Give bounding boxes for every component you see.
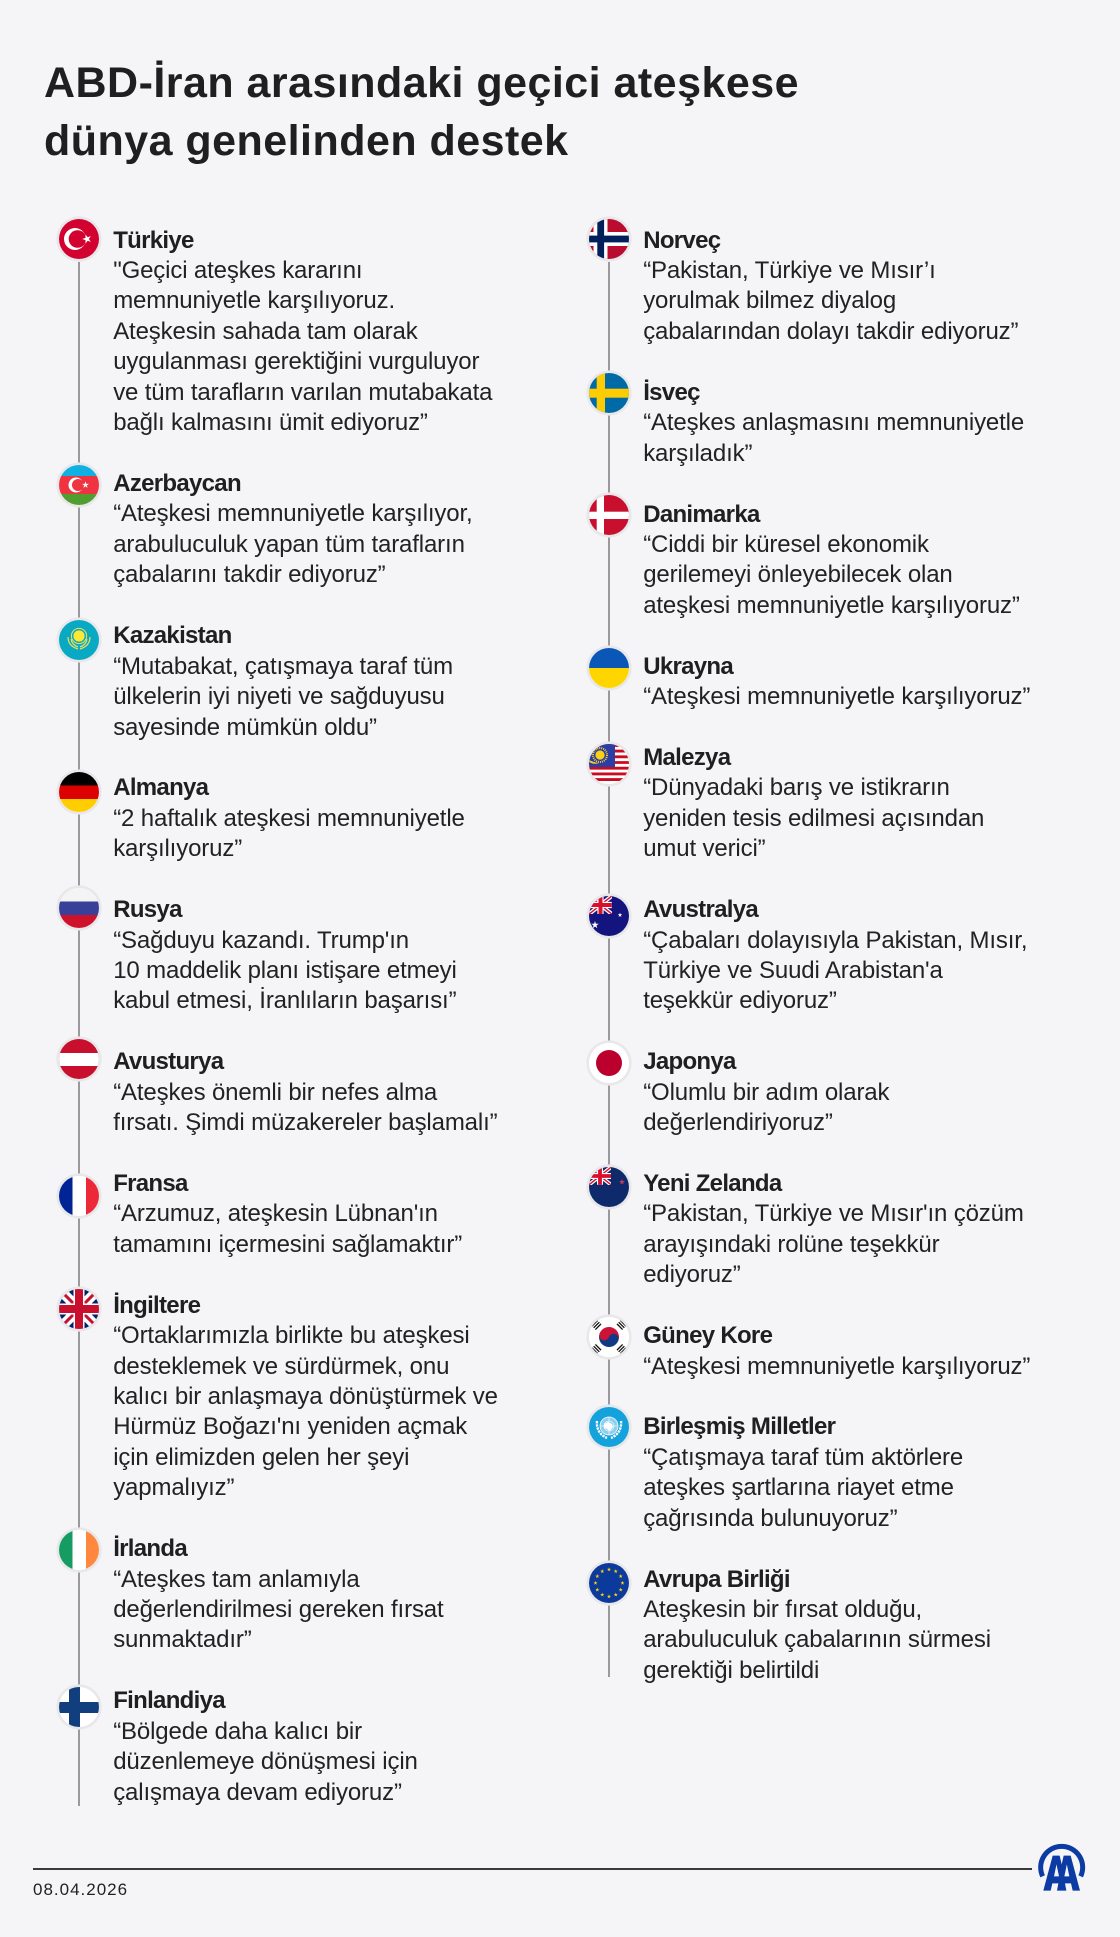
quote: “2 haftalık ateşkesi memnuniyetle bbox=[113, 805, 465, 832]
quote: Hürmüz Boğazı'nı yeniden açmak bbox=[113, 1413, 467, 1440]
entry: Rusya bbox=[56, 885, 457, 1014]
entry: Birleşmiş Milletler bbox=[586, 1404, 963, 1532]
icon: European Union flag bbox=[589, 1563, 629, 1603]
quote bbox=[643, 409, 1024, 467]
quote bbox=[113, 257, 492, 436]
quote bbox=[643, 1444, 963, 1532]
quote: “Ateşkesi memnuniyetle karşılıyoruz” bbox=[643, 683, 1030, 710]
entry: Norveç bbox=[586, 216, 1018, 345]
quote: için elimizden gelen her şeyi bbox=[113, 1444, 409, 1471]
entry: Azerbaycan bbox=[56, 462, 473, 588]
quote: “Bölgede daha kalıcı bir bbox=[113, 1718, 362, 1745]
entry: Kazakistan bbox=[56, 617, 453, 740]
icon: Turkey flag bbox=[59, 219, 99, 259]
entry: Yeni Zelanda bbox=[586, 1164, 1024, 1288]
quote bbox=[643, 1595, 991, 1686]
entry: İsveç bbox=[586, 370, 1024, 467]
quote: teşekkür ediyoruz” bbox=[643, 987, 837, 1014]
entry: Japonya bbox=[586, 1040, 890, 1136]
country name: Ukrayna bbox=[643, 653, 733, 680]
entry: Avrupa Birliği bbox=[586, 1560, 991, 1684]
country name: Azerbaycan bbox=[113, 470, 241, 497]
entry: Avustralya bbox=[586, 893, 1027, 1014]
country name: Almanya bbox=[113, 774, 208, 801]
icon: Kazakhstan flag bbox=[59, 620, 99, 660]
title bbox=[44, 58, 799, 164]
country name: Japonya bbox=[643, 1048, 736, 1075]
icon: Azerbaijan flag bbox=[59, 465, 99, 505]
quote: çabalarından dolayı takdir ediyoruz” bbox=[643, 318, 1018, 345]
quote bbox=[113, 1322, 498, 1501]
quote: yeniden tesis edilmesi açısından bbox=[643, 805, 984, 832]
quote bbox=[113, 1566, 444, 1653]
country name: Norveç bbox=[643, 227, 720, 254]
entry: Ukrayna bbox=[586, 645, 1030, 710]
icon: Norway flag bbox=[589, 219, 629, 259]
entry: Finlandiya bbox=[56, 1684, 418, 1806]
country name: Türkiye bbox=[113, 227, 194, 254]
quote: karşılıyoruz” bbox=[113, 835, 242, 862]
entry: Güney Kore bbox=[586, 1314, 1030, 1380]
quote: desteklemek ve sürdürmek, onu bbox=[113, 1353, 449, 1380]
quote: “Ciddi bir küresel ekonomik bbox=[643, 531, 929, 558]
quote: ülkelerin iyi niyeti ve sağduyusu bbox=[113, 683, 445, 710]
quote: çabalarını takdir ediyoruz” bbox=[113, 561, 386, 588]
country name: Finlandiya bbox=[113, 1687, 225, 1714]
quote: “Pakistan, Türkiye ve Mısır’ı bbox=[643, 257, 936, 284]
quote bbox=[113, 1718, 418, 1806]
quote: Türkiye ve Suudi Arabistan'a bbox=[643, 957, 943, 984]
quote bbox=[113, 805, 465, 862]
icon: AA logo bbox=[1030, 1835, 1095, 1900]
country name: Güney Kore bbox=[643, 1322, 772, 1349]
icon: Ukraine flag bbox=[589, 648, 629, 688]
quote: "Geçici ateşkes kararını bbox=[113, 257, 362, 284]
country name: Rusya bbox=[113, 896, 182, 923]
quote: “Ateşkesi memnuniyetle karşılıyoruz” bbox=[643, 1353, 1030, 1380]
quote: arayışındaki rolüne teşekkür bbox=[643, 1231, 939, 1258]
country name: Yeni Zelanda bbox=[643, 1170, 782, 1197]
quote: “Ateşkes anlaşmasını memnuniyetle bbox=[643, 409, 1024, 436]
quote: “Sağduyu kazandı. Trump'ın bbox=[113, 927, 409, 954]
quote: ediyoruz” bbox=[643, 1261, 741, 1288]
quote: ateşkes şartlarına riayet etme bbox=[643, 1474, 954, 1501]
quote: fırsatı. Şimdi müzakereler başlamalı” bbox=[113, 1109, 497, 1136]
quote: çalışmaya devam ediyoruz” bbox=[113, 1778, 402, 1806]
country name: Malezya bbox=[643, 744, 730, 771]
icon: UK flag bbox=[59, 1289, 99, 1329]
quote: uygulanması gerektiğini vurguluyor bbox=[113, 348, 479, 375]
quote bbox=[113, 500, 473, 588]
icon: Ireland flag bbox=[59, 1530, 99, 1570]
icon: Japan flag bbox=[589, 1043, 629, 1083]
quote: “Ateşkes tam anlamıyla bbox=[113, 1566, 360, 1593]
quote: arabuluculuk çabalarının sürmesi bbox=[643, 1626, 991, 1653]
quote: gerilemeyi önleyebilecek olan bbox=[643, 561, 953, 588]
quote: yapmalıyız” bbox=[113, 1474, 234, 1501]
quote: çağrısında bulunuyoruz” bbox=[643, 1505, 897, 1532]
quote: “Arzumuz, ateşkesin Lübnan'ın bbox=[113, 1200, 438, 1227]
icon: Austria flag bbox=[59, 1039, 99, 1079]
country name: İrlanda bbox=[113, 1535, 187, 1562]
icon: France flag bbox=[59, 1176, 99, 1216]
quote: ateşkesi memnuniyetle karşılıyoruz” bbox=[643, 592, 1020, 619]
entry: Danimarka bbox=[586, 492, 1020, 619]
quote: “Pakistan, Türkiye ve Mısır'ın çözüm bbox=[643, 1200, 1024, 1227]
entry: Malezya bbox=[586, 741, 984, 862]
quote: “Olumlu bir adım olarak bbox=[643, 1079, 889, 1106]
entry: Türkiye bbox=[56, 216, 492, 436]
entry: Almanya bbox=[56, 769, 465, 862]
quote: “Ateşkesi memnuniyetle karşılıyor, bbox=[113, 500, 473, 527]
entry: İngiltere bbox=[56, 1286, 498, 1501]
quote: “Dünyadaki barış ve istikrarın bbox=[643, 774, 950, 801]
icon: United Nations flag bbox=[589, 1407, 629, 1447]
quote: “Çabaları dolayısıyla Pakistan, Mısır, bbox=[643, 927, 1027, 954]
quote bbox=[643, 1079, 890, 1136]
quote bbox=[643, 531, 1020, 619]
timeline line: left column bbox=[78, 262, 80, 1806]
country name: Avrupa Birliği bbox=[643, 1566, 790, 1592]
title: dünya genelinden destek bbox=[44, 116, 569, 164]
country name: Avustralya bbox=[643, 896, 758, 923]
country name: Danimarka bbox=[643, 500, 760, 528]
quote: karşıladık” bbox=[643, 440, 752, 467]
country name: Birleşmiş Milletler bbox=[643, 1413, 835, 1440]
quote bbox=[643, 1200, 1024, 1288]
footer rule bbox=[33, 1868, 1032, 1870]
quote: umut verici” bbox=[643, 835, 766, 862]
quote: Ateşkesin sahada tam olarak bbox=[113, 318, 418, 345]
country name: İngiltere bbox=[113, 1292, 200, 1319]
title: ABD-İran arasındaki geçici ateşkese bbox=[44, 58, 799, 106]
quote bbox=[643, 927, 1027, 1014]
quote: kabul etmesi, İranlıların başarısı” bbox=[113, 987, 456, 1014]
icon: Sweden flag bbox=[589, 373, 629, 413]
country name: Fransa bbox=[113, 1170, 188, 1197]
icon: Finland flag bbox=[59, 1687, 99, 1727]
quote: sunmaktadır” bbox=[113, 1626, 252, 1653]
quote: tamamını içermesini sağlamaktır” bbox=[113, 1231, 462, 1258]
quote: bağlı kalmasını ümit ediyoruz” bbox=[113, 409, 428, 436]
entry: Avusturya bbox=[56, 1036, 497, 1136]
country name: Kazakistan bbox=[113, 622, 232, 649]
quote: memnuniyetle karşılıyoruz. bbox=[113, 287, 395, 314]
icon: Russia flag bbox=[59, 888, 99, 928]
quote bbox=[643, 257, 1018, 345]
entry: Fransa bbox=[56, 1170, 462, 1258]
quote: düzenlemeye dönüşmesi için bbox=[113, 1748, 418, 1775]
quote bbox=[113, 927, 457, 1014]
icon: South Korea flag bbox=[589, 1317, 629, 1357]
quote: kalıcı bir anlaşmaya dönüştürmek ve bbox=[113, 1383, 498, 1410]
quote: Ateşkesin bir fırsat olduğu, bbox=[643, 1596, 922, 1623]
timeline line: right column bbox=[608, 262, 610, 1677]
quote: değerlendirilmesi gereken fırsat bbox=[113, 1596, 444, 1623]
quote: “Mutabakat, çatışmaya taraf tüm bbox=[113, 653, 453, 680]
quote: ve tüm tarafların varılan mutabakata bbox=[113, 379, 492, 406]
quote: yorulmak bilmez diyalog bbox=[643, 287, 896, 314]
icon: Australia flag bbox=[589, 896, 629, 936]
quote bbox=[113, 1200, 462, 1258]
quote: “Ortaklarımızla birlikte bu ateşkesi bbox=[113, 1322, 470, 1349]
quote bbox=[113, 653, 453, 740]
quote: “Ateşkes önemli bir nefes alma bbox=[113, 1079, 437, 1106]
country name: Avusturya bbox=[113, 1048, 223, 1075]
icon: Malaysia flag bbox=[589, 744, 629, 784]
quote: gerektiği belirtildi bbox=[643, 1657, 819, 1684]
country name: İsveç bbox=[643, 379, 700, 406]
quote bbox=[113, 1079, 497, 1136]
icon: Denmark flag bbox=[589, 495, 629, 535]
quote: değerlendiriyoruz” bbox=[643, 1109, 833, 1136]
quote: sayesinde mümkün oldu” bbox=[113, 714, 377, 740]
quote: arabuluculuk yapan tüm tarafların bbox=[113, 531, 465, 558]
entry: İrlanda bbox=[56, 1527, 444, 1653]
quote: 10 maddelik planı istişare etmeyi bbox=[113, 957, 457, 984]
quote bbox=[643, 774, 984, 862]
quote: “Çatışmaya taraf tüm aktörlere bbox=[643, 1444, 963, 1471]
icon: New Zealand flag bbox=[589, 1167, 629, 1207]
icon: Germany flag bbox=[59, 772, 99, 812]
date: 08.04.2026 bbox=[33, 1880, 128, 1899]
